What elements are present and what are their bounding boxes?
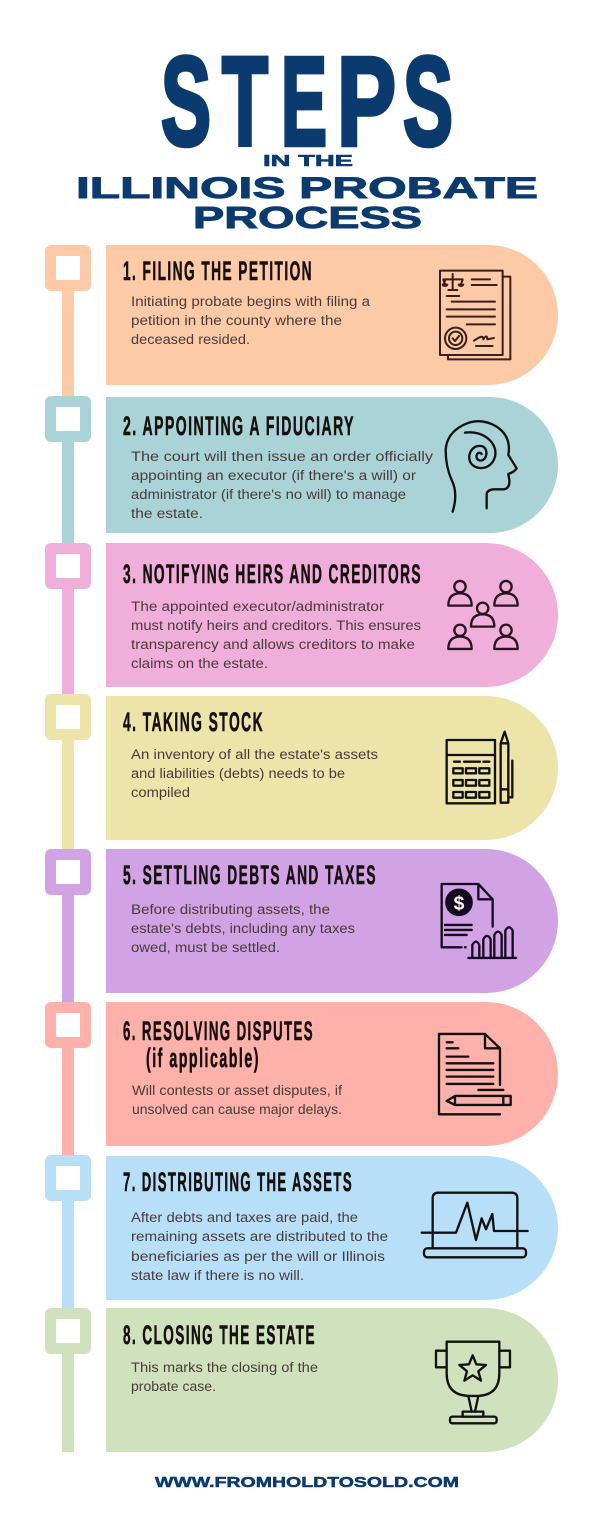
text: step 5: estate's debts, including any taxes [131, 921, 355, 936]
text: step 5: Before distributing assets, the [131, 902, 330, 917]
panel: step 8 closing the estate [106, 1308, 558, 1452]
title [76, 31, 538, 235]
text: step 7: remaining assets are distributed to the [131, 1229, 388, 1244]
panel: step 7 distributing the assets: 7. DISTRIBUTING THE ASSETS [123, 1167, 353, 1197]
timeline marker 7 [45, 1155, 91, 1309]
icon: legal document [440, 271, 510, 359]
title: IN THE [263, 153, 354, 170]
timeline marker 4 [45, 694, 91, 850]
icon: laptop with pulse line [422, 1193, 528, 1257]
icon: document and pen [439, 1034, 511, 1114]
text: step 1: Initiating probate begins with filing a [131, 294, 371, 309]
text: step 2: The court will then issue an order officially [131, 449, 433, 464]
panel: step 3 notifying heirs and creditors [106, 543, 558, 687]
timeline marker 8 [45, 1308, 91, 1452]
icon: financial report [442, 884, 516, 958]
panel: step 1 filing the petition [106, 245, 558, 385]
footer website: WWW.FROMHOLDTOSOLD.COM [155, 1474, 459, 1491]
icon: trophy [436, 1342, 510, 1423]
title: S [403, 31, 453, 172]
text: step 6: unsolved can cause major delays. [132, 1102, 342, 1117]
heading: step 6 [123, 1016, 314, 1073]
icon: calculator and pencil [447, 732, 512, 803]
heading: step 6: (if applicable) [146, 1043, 260, 1073]
heading: step 1: 1. FILING THE PETITION [123, 256, 313, 286]
text: step 5: owed, must be settled. [131, 940, 280, 955]
text: step 3: transparency and allows creditors to make [131, 637, 415, 652]
text: step 1 [131, 294, 371, 347]
text: step 7: beneficiaries as per the will or Illinois [131, 1249, 385, 1264]
text: step 4: compiled [131, 785, 190, 800]
title: P [337, 31, 396, 172]
panel: step 4 taking stock [106, 696, 558, 840]
icon: group of people [448, 581, 518, 649]
text: step 1: deceased resided. [131, 332, 250, 347]
text: step 8: probate case. [131, 1379, 216, 1394]
timeline marker 2 [45, 396, 91, 544]
text: step 8 [131, 1360, 318, 1394]
text: step 7: After debts and taxes are paid, the [131, 1210, 358, 1225]
title: ILLINOIS PROBATE [76, 172, 538, 205]
icon: head with spiral [446, 421, 517, 512]
text: step 3: claims on the estate. [131, 656, 268, 671]
panel: step 2 appointing a fiduciary [106, 397, 558, 533]
text: step 4: and liabilities (debts) needs to be [131, 766, 345, 781]
text: step 2 [131, 449, 433, 521]
icon: financial report: $ [454, 893, 465, 914]
heading: step 5: 5. SETTLING DEBTS AND TAXES [123, 860, 377, 890]
text: step 7: state law if there is no will. [131, 1268, 304, 1283]
heading: step 2: 2. APPOINTING A FIDUCIARY [123, 411, 355, 441]
text: step 2: appointing an executor (if there's a will) or [131, 468, 417, 483]
title: T [222, 31, 268, 172]
panel: step 6 resolving disputes [106, 1002, 558, 1146]
text: step 3: must notify heirs and creditors. This ensures [131, 618, 421, 633]
text: step 2: the estate. [131, 506, 203, 521]
text: step 3: The appointed executor/administrator [131, 599, 385, 614]
text: step 8: This marks the closing of the [131, 1360, 318, 1375]
panel: step 6 resolving disputes: 6. RESOLVING DISPUTES [123, 1016, 314, 1046]
text: step 4: An inventory of all the estate's assets [131, 747, 378, 762]
title: PROCESS [193, 200, 422, 235]
panel: step 7 distributing the assets [106, 1156, 558, 1300]
timeline marker 1 [45, 245, 91, 398]
text: step 5 [131, 902, 355, 955]
title: S [161, 31, 211, 172]
text: step 1: petition in the county where the [131, 313, 342, 328]
text: step 4 [131, 747, 378, 800]
text: step 3 [131, 599, 421, 671]
timeline marker 3 [45, 543, 91, 695]
text: step 6: Will contests or asset disputes, if [132, 1083, 342, 1098]
timeline marker 5 [45, 849, 91, 1003]
heading: step 8: 8. CLOSING THE ESTATE [123, 1320, 316, 1350]
text: step 2: administrator (if there's no will) to manage [131, 487, 406, 502]
timeline marker 6 [45, 1002, 91, 1156]
heading: step 4: 4. TAKING STOCK [123, 707, 264, 737]
panel: step 5 settling debts and taxes [106, 849, 558, 993]
text: step 7 [131, 1210, 388, 1283]
text: step 6 [132, 1083, 342, 1117]
title: E [281, 31, 327, 172]
